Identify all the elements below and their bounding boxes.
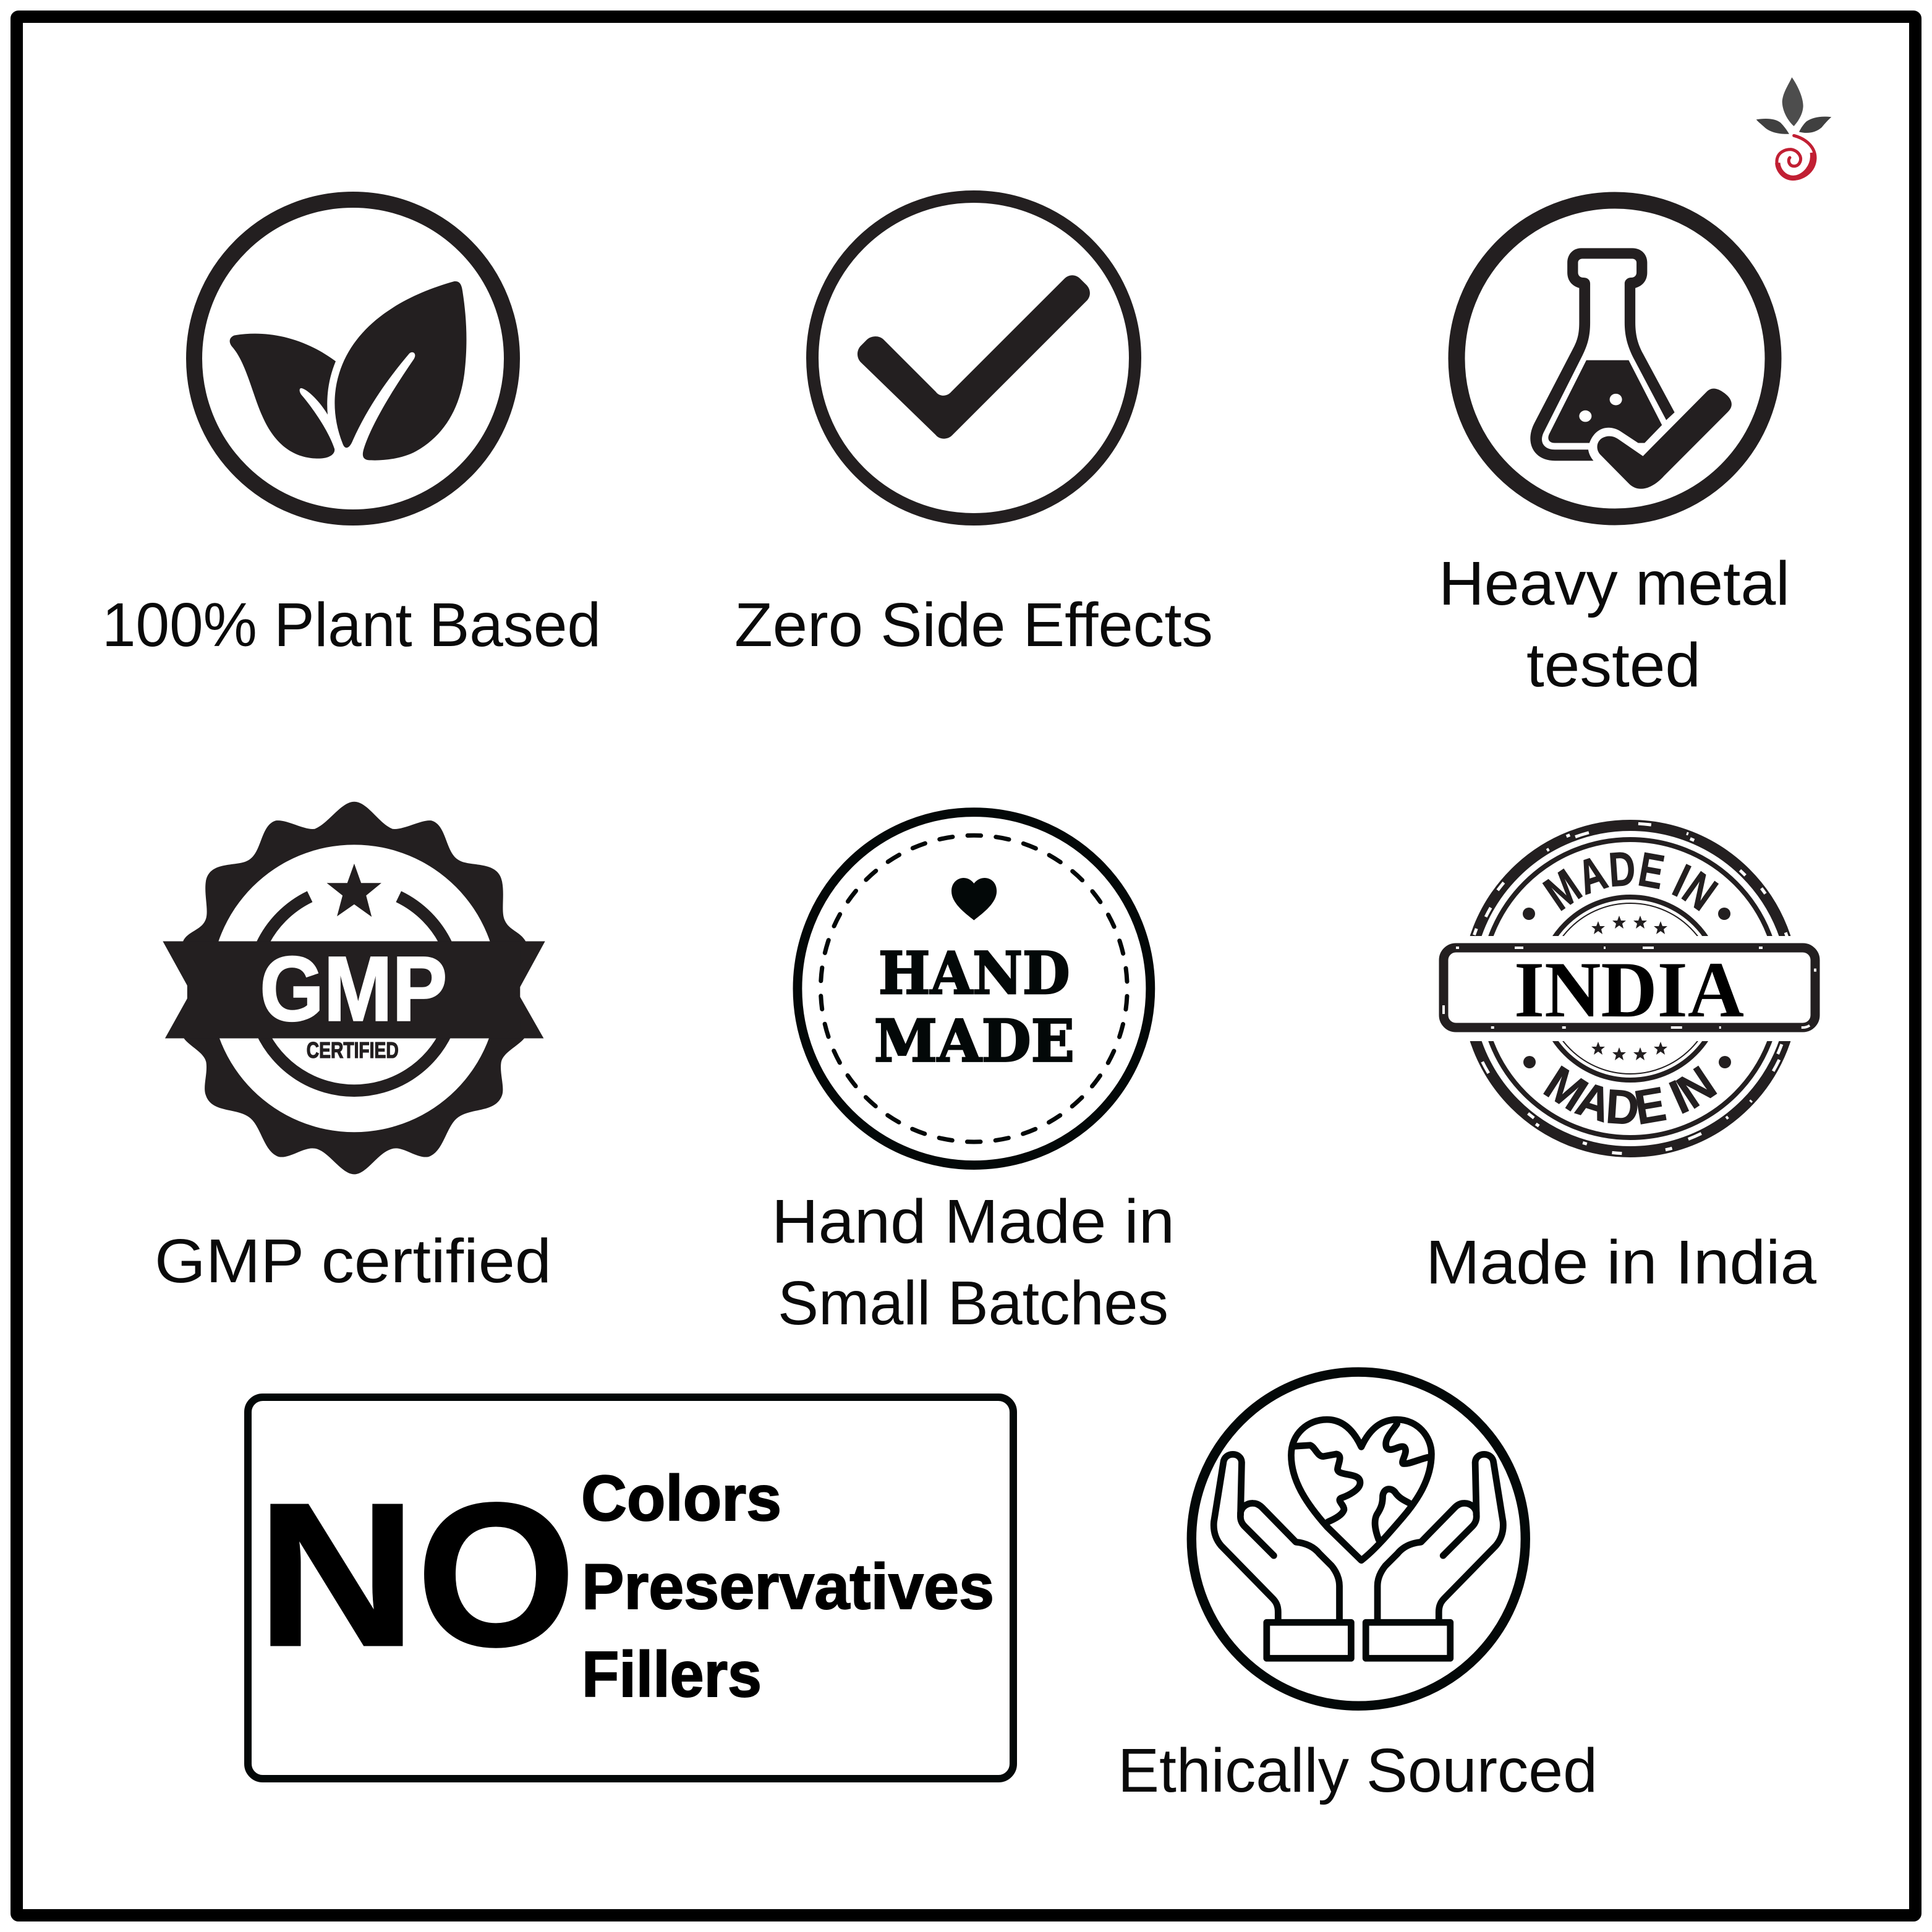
label: Hand Made in Small Batches <box>772 1187 1175 1338</box>
label: Heavy metal tested <box>1439 549 1790 700</box>
banner gap <box>1425 936 1833 1041</box>
hand wordmark: HAND <box>879 940 1070 1008</box>
heading: NO: N <box>257 1460 417 1688</box>
icon: right hand <box>1366 1454 1503 1658</box>
heading: NO: O <box>417 1460 576 1688</box>
stamp: made in India: MADE IN <box>1542 852 1719 911</box>
certified wordmark: CERTIFIED <box>307 1038 399 1063</box>
list: preservatives: Preservatives <box>582 1551 994 1623</box>
India wordmark: INDIA <box>1514 945 1744 1034</box>
icon: check mark <box>857 275 1090 439</box>
icon: left hand <box>1214 1454 1351 1658</box>
label: Heavy metal tested: Heavy metal <box>1439 549 1790 618</box>
logo: three leaves and red spiral <box>1756 77 1831 179</box>
banner <box>1444 948 1815 1028</box>
label: Heavy metal tested: tested <box>1526 631 1701 700</box>
label: Hand Made in Small Batches: Small Batches <box>778 1269 1168 1338</box>
ribbon band <box>187 941 520 1039</box>
stamp: made in India: MADE IN <box>1543 1065 1717 1125</box>
badge: zero side effects <box>812 197 1135 519</box>
icon: two leaves <box>230 281 466 461</box>
badge: GMP certified <box>163 802 545 1174</box>
badge: ethically sourced <box>1191 1372 1525 1706</box>
label: Hand Made in Small Batches: Hand Made in <box>772 1187 1175 1256</box>
list: colors: Colors <box>581 1463 781 1534</box>
arc text: bottom <box>1495 989 1766 1124</box>
label: Ethically Sourced: Ethically Sourced <box>1118 1736 1598 1805</box>
badge: heavy metal tested <box>1457 200 1773 517</box>
dots <box>1523 908 1731 1068</box>
badge: hand made <box>798 812 1151 1165</box>
made wordmark: MADE <box>874 1007 1075 1075</box>
icon: flask with check <box>1530 248 1732 489</box>
label: Made in India: Made in India <box>1426 1228 1816 1297</box>
label: Zero Side Effects: Zero Side Effects <box>734 590 1213 660</box>
badge: 100% plant based <box>194 200 512 517</box>
label: GMP certified: GMP certified <box>155 1227 551 1296</box>
icon: star <box>327 864 381 917</box>
panel: no colors, preservatives, fillers <box>248 1397 1013 1779</box>
stitched ring <box>820 835 1127 1142</box>
stamp: made in India <box>1439 820 1820 1157</box>
GMP wordmark: GMP <box>260 938 447 1040</box>
stars <box>1591 916 1667 1060</box>
icon: heart globe <box>1291 1419 1431 1560</box>
arc text: top <box>1527 885 1734 989</box>
icon: heart <box>951 878 997 920</box>
label: 100% Plant Based: 100% Plant Based <box>102 590 601 660</box>
list: fillers: Fillers <box>582 1639 762 1711</box>
